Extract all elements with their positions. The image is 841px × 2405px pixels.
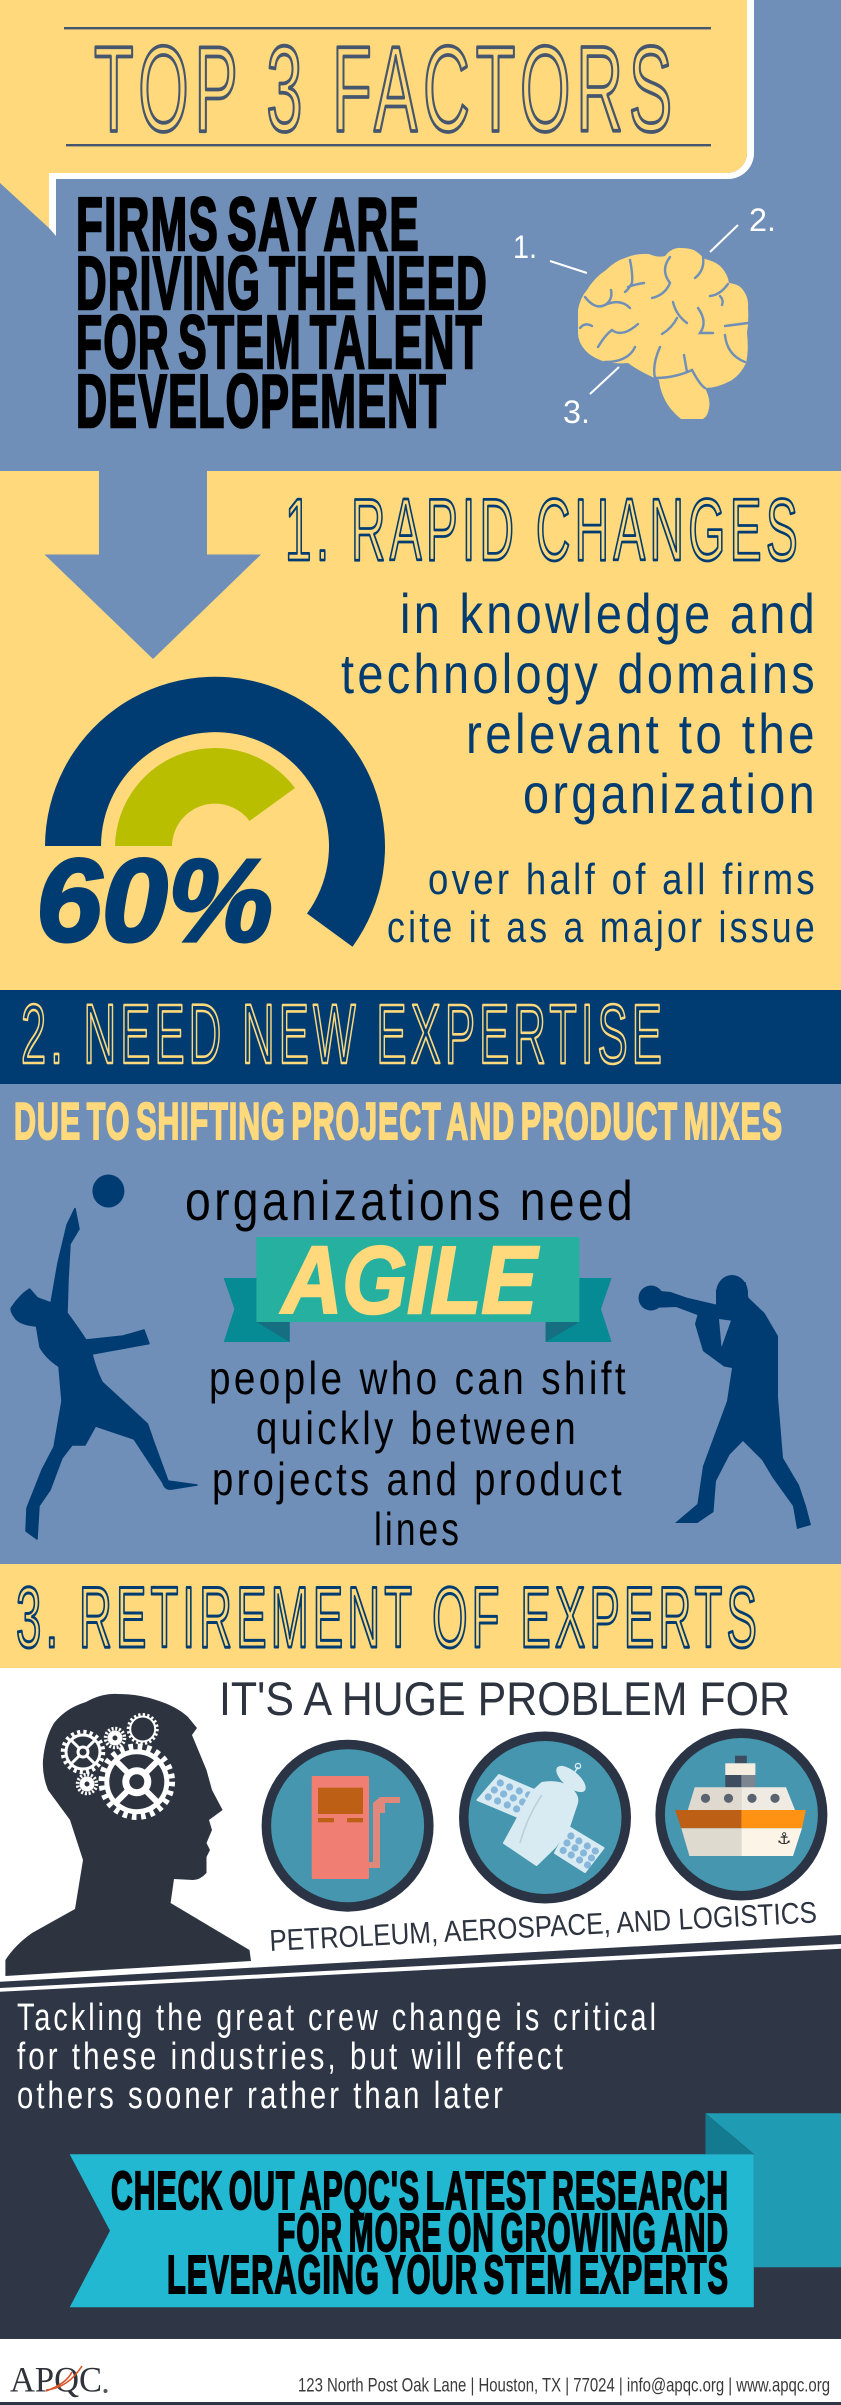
text: call to action: [111, 2161, 729, 2305]
stat: 60%: 60%: [36, 835, 273, 967]
banner: call to action: [70, 2113, 841, 2307]
heading: huge problem: IT'S A HUGE PROBLEM FOR: [219, 1672, 790, 1725]
icon: head with gears: [5, 1694, 251, 1976]
gear: small bottom: [78, 1774, 96, 1794]
gear: small top: [106, 1728, 124, 1748]
panel: title speech bubble: [0, 0, 754, 236]
text: over half of firms: [387, 855, 818, 952]
panel: factor 2 body: [0, 1084, 841, 1564]
heading: firms say: FIRMS SAY ARE: [76, 182, 420, 266]
text: crew change: Tackling the great crew change is critical: [17, 1997, 659, 2039]
text: knowledge description: [341, 582, 818, 825]
brain callouts: [513, 202, 776, 430]
panel: factor 2 header band: [0, 990, 841, 1084]
text: organizations need: organizations need: [185, 1169, 636, 1232]
panel: factor 3 body: [0, 1668, 841, 1998]
logo: APQC: APQC: [10, 2360, 102, 2400]
icon: fuel pump: [262, 1740, 434, 1912]
text: people who can shift: people who can shift: [209, 1352, 629, 1404]
icon: volleyball: [92, 1174, 124, 1208]
gear: ring: [128, 1714, 157, 1744]
heading: firms say: [76, 182, 488, 443]
icon: boxer silhouette: [638, 1275, 811, 1529]
gear: medium: [63, 1732, 103, 1772]
ribbon: agile: [224, 1227, 612, 1342]
gear: large: [102, 1747, 172, 1817]
text: crew change: others sooner rather than later: [17, 2075, 506, 2117]
word: agile: AGILE: [280, 1227, 540, 1334]
icon: ship: [655, 1728, 827, 1900]
heading: firms say: DRIVING THE NEED: [76, 241, 488, 325]
panel: intro background: [0, 0, 841, 471]
icon: volleyball player silhouette: [11, 1208, 197, 1539]
brain callouts: 1.: [513, 229, 537, 265]
text: crew change: for these industries, but will effect: [17, 2036, 566, 2078]
arrow: down: [44, 471, 261, 659]
panel: footer: [0, 2339, 841, 2405]
icon: satellite: [459, 1732, 631, 1904]
gauge chart: 60 percent: [36, 677, 385, 967]
brain callouts: 3.: [563, 394, 590, 430]
panel: factor 3 header band: [0, 1564, 841, 1668]
text: people who can shift: lines: [374, 1503, 462, 1555]
heading: firms say: FOR STEM TALENT: [76, 300, 483, 384]
text: crew change: [17, 1997, 659, 2117]
panel: lower dark section: [0, 1935, 841, 2339]
text: people who can shift: [209, 1352, 629, 1555]
text: people who can shift: quickly between: [256, 1402, 579, 1454]
icon: brain: [578, 248, 748, 419]
panel: factor 1 background: [0, 471, 841, 990]
text: people who can shift: projects and product: [212, 1453, 625, 1505]
heading: firms say: DEVELOPEMENT: [76, 359, 447, 443]
anchor: ⚓: [777, 1829, 791, 1848]
brain callouts: 2.: [749, 202, 776, 238]
